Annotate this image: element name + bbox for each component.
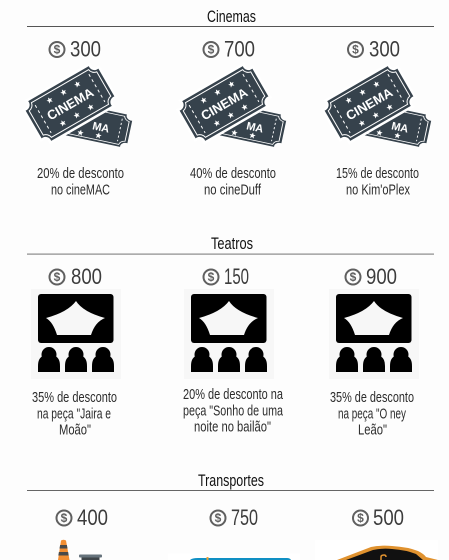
icon: cinema tickets: MA — [245, 120, 264, 136]
price: 750: $ — [215, 511, 222, 525]
text: offer: na peça "Jaira e — [37, 406, 111, 422]
price: 800 — [50, 264, 102, 289]
icon: cinema tickets — [176, 63, 287, 148]
price: 800: $ — [54, 270, 61, 284]
price: 700: 700 — [224, 36, 255, 62]
icon: theatre stage — [184, 289, 274, 379]
card: teatro 2 — [183, 264, 283, 436]
text: offer: noite no bailão" — [194, 418, 271, 436]
price: 300 — [50, 36, 101, 62]
text: offer — [330, 389, 414, 438]
card: cinema 3 — [321, 36, 432, 198]
price: 400: $ — [61, 511, 68, 525]
price: 500: 500 — [373, 505, 404, 530]
icon: cinema tickets: CINEMA — [343, 84, 396, 123]
text: offer: na peça "O ney — [338, 406, 406, 422]
card: teatro 3 — [329, 264, 419, 438]
price: 400 — [56, 505, 108, 530]
text: offer — [336, 165, 419, 198]
text: offer: 15% de desconto — [336, 165, 419, 182]
price: 750: 750 — [231, 505, 258, 530]
card: teatro 1 — [31, 264, 121, 438]
price: 300: $ — [54, 43, 61, 57]
text: offer: 20% de desconto na — [183, 386, 283, 403]
text: offer: no Kim'oPlex — [346, 182, 410, 198]
icon: theatre stage — [31, 289, 121, 379]
text: offer: Moão" — [59, 422, 91, 438]
text: offer — [37, 165, 124, 198]
text: offer: Leão" — [358, 422, 387, 438]
text: offer: no cineDuff — [204, 182, 262, 198]
price: 800: 800 — [71, 264, 102, 289]
price: 500: $ — [357, 511, 364, 525]
price: 150 — [204, 264, 249, 289]
price: 150: 150 — [224, 264, 249, 289]
text: offer — [183, 386, 283, 436]
price: 300 — [348, 36, 400, 62]
card: cinema 2 — [176, 36, 287, 198]
section heading: Cinemas: Cinemas — [207, 8, 256, 26]
section heading: Transportes: Transportes — [198, 472, 264, 490]
icon: cinema tickets: MA — [91, 120, 110, 136]
price: 150: $ — [208, 270, 215, 284]
card: transporte 2 — [168, 505, 300, 560]
icon: cinema tickets — [321, 63, 432, 148]
text: offer: 35% de desconto — [32, 389, 117, 406]
price: 700: $ — [208, 43, 215, 57]
price: 400: 400 — [77, 505, 108, 530]
text: offer: 35% de desconto — [330, 389, 414, 406]
icon: theatre stage — [329, 289, 419, 379]
price: 300: 300 — [70, 36, 101, 62]
icon: bus — [168, 554, 300, 560]
text: offer — [190, 165, 276, 198]
icon: cinema tickets: CINEMA — [198, 84, 251, 123]
card: cinema 1 — [22, 36, 133, 198]
text: offer — [32, 389, 117, 438]
icon: cinema tickets: CINEMA — [44, 84, 97, 123]
icon: traffic cone and bin — [58, 540, 102, 560]
price: 300: 300 — [369, 36, 400, 62]
icon: orange vehicle — [315, 540, 438, 560]
price: 900: $ — [350, 270, 357, 284]
text: offer: 20% de desconto — [37, 165, 124, 182]
card: transporte 3 — [315, 505, 438, 560]
price: 900 — [346, 264, 397, 289]
price: 500 — [353, 505, 404, 530]
text: offer: peça "Sonho de uma — [183, 402, 283, 420]
text: offer: no cineMAC — [51, 182, 110, 198]
price: 900: 900 — [366, 264, 397, 289]
card: transporte 1 — [56, 505, 108, 560]
text: offer: 40% de desconto — [190, 165, 276, 182]
price: 700 — [204, 36, 255, 62]
section heading: Teatros: Teatros — [211, 235, 253, 253]
price: 300: $ — [352, 43, 359, 57]
icon: cinema tickets: MA — [390, 120, 409, 136]
icon: cinema tickets — [22, 63, 133, 148]
price: 750 — [210, 505, 258, 530]
